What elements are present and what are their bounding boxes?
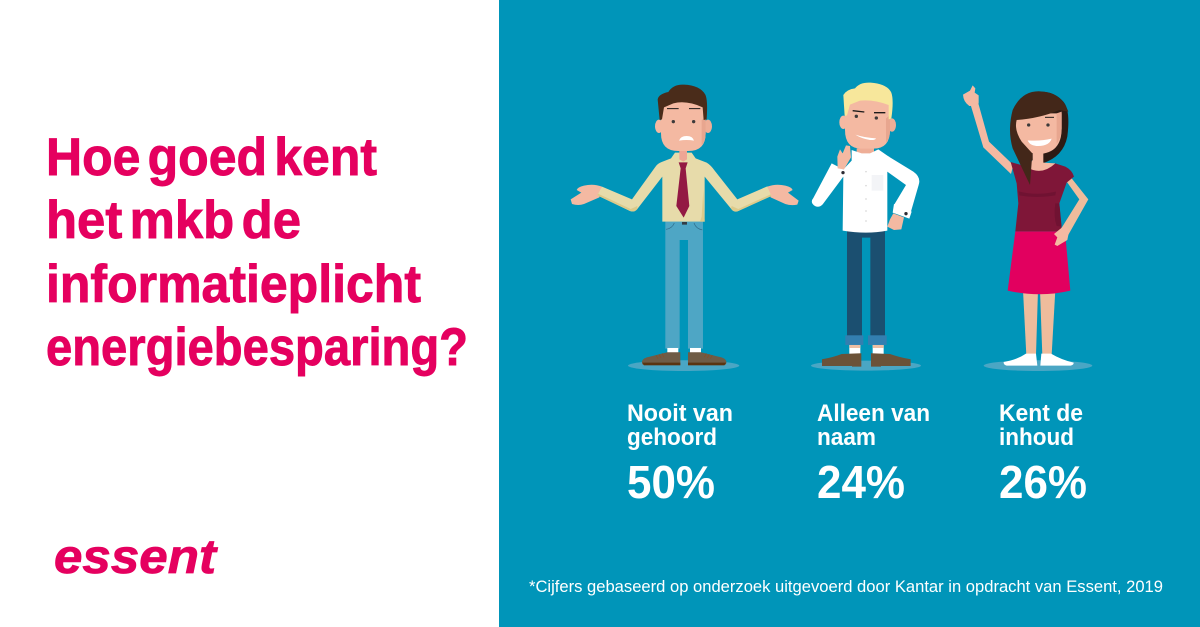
- smile: [1028, 139, 1052, 146]
- head: [661, 102, 706, 151]
- stat: nooit van gehoord: [627, 400, 733, 508]
- neck: [679, 149, 687, 162]
- hand on hip: [887, 213, 904, 230]
- panel: white left background: [0, 0, 499, 627]
- ground shadow: [628, 360, 739, 371]
- socks: [667, 348, 678, 354]
- shoes: [642, 352, 680, 365]
- hair back: [1030, 92, 1068, 163]
- hair: [658, 85, 707, 120]
- stat: nooit van gehoord: gehoord: [627, 424, 717, 451]
- hand on hip: [1054, 225, 1069, 246]
- trouser cuffs: [845, 335, 863, 345]
- mouth: [855, 135, 876, 140]
- shirt with arms: [812, 149, 919, 233]
- footnote: *Cijfers gebaseerd op onderzoek uitgevoerd door Kantar in opdracht van Essent, 2019: [529, 577, 1163, 596]
- ears: [655, 120, 663, 133]
- eyes: [855, 115, 858, 118]
- stat: nooit van gehoord: 50%: [627, 456, 715, 508]
- trousers: [665, 222, 703, 349]
- shirt pocket: [872, 175, 883, 191]
- eyebrows: [667, 107, 700, 110]
- eyes: [1027, 123, 1030, 127]
- skirt: [1008, 231, 1070, 294]
- neck: [857, 148, 874, 162]
- hair: [843, 83, 893, 119]
- stat: nooit van gehoord: Nooit van: [627, 400, 733, 427]
- stat: alleen van naam: 24%: [817, 456, 905, 508]
- trousers: [847, 230, 885, 337]
- shirt buttons: [865, 171, 867, 222]
- ears: [839, 116, 847, 129]
- title: energiebesparing?: [46, 318, 468, 377]
- stat: alleen van naam: naam: [817, 424, 876, 451]
- top: [1011, 162, 1074, 231]
- figure: man shrugging, never heard of it: [571, 85, 799, 371]
- neck and chest: [1027, 150, 1055, 171]
- stat: kent de inhoud: [999, 400, 1087, 508]
- hair front: [1010, 91, 1068, 185]
- mouth: [679, 136, 694, 141]
- stat: kent de inhoud: inhoud: [999, 424, 1074, 451]
- shoes: [1004, 354, 1037, 366]
- hands: [571, 185, 602, 205]
- socks: [849, 345, 860, 355]
- title: het mkb de: [46, 191, 301, 250]
- stat: kent de inhoud: 26%: [999, 456, 1087, 508]
- panel: blue right background: [499, 0, 1200, 627]
- head: [845, 100, 890, 149]
- stat: alleen van naam: [817, 400, 930, 508]
- eyebrows: [853, 111, 885, 113]
- logo: essent: essent: [54, 531, 218, 584]
- ground shadow: [811, 361, 921, 371]
- raised hand: [837, 145, 851, 169]
- eyebrow: [1045, 116, 1054, 119]
- figure: woman raising hand, knows the content: [963, 85, 1092, 371]
- shoes: [822, 353, 861, 367]
- raised thumb hand: [963, 85, 979, 106]
- ground shadow: [984, 360, 1092, 371]
- shirt with arms: [597, 153, 771, 222]
- cuff buttons: [841, 171, 845, 174]
- title: Hoe goed kent: [46, 128, 377, 187]
- stat: alleen van naam: Alleen van: [817, 400, 930, 427]
- title: [46, 128, 468, 377]
- tie: [676, 162, 689, 218]
- head: [1015, 113, 1062, 154]
- hip arm: [1061, 178, 1088, 237]
- title: informatieplicht: [46, 255, 421, 314]
- raised arm: [971, 103, 1013, 174]
- eyes: [672, 120, 675, 123]
- stat: kent de inhoud: Kent de: [999, 400, 1083, 427]
- legs: [1023, 290, 1038, 355]
- figure: blond man, only knows the name: [811, 83, 921, 371]
